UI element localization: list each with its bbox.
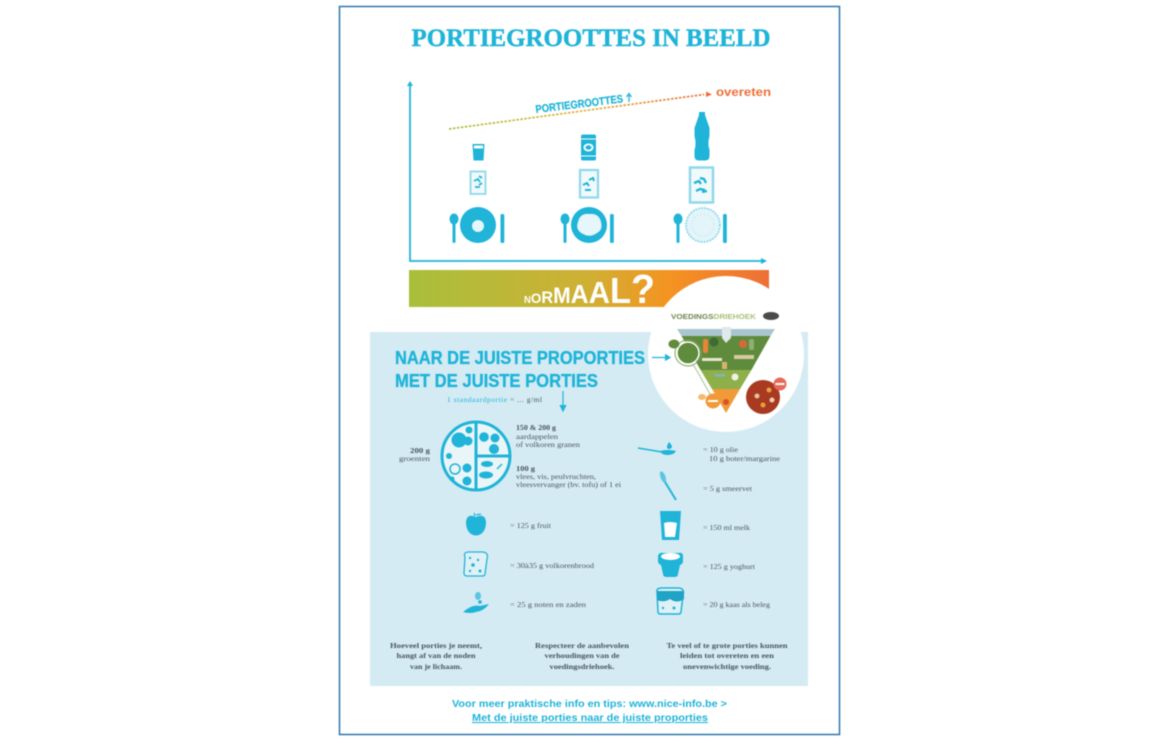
text: note 3: leiden tot overeten en een xyxy=(680,652,774,660)
icon: bread with cheese xyxy=(657,588,684,614)
callout: small green badge xyxy=(668,340,680,348)
food items xyxy=(703,339,708,353)
icon: knife xyxy=(659,471,676,500)
food pyramid xyxy=(677,327,775,413)
gradient bar xyxy=(409,270,769,307)
label: vegetables: groenten xyxy=(399,455,431,463)
connector line xyxy=(693,364,710,394)
text: oil xyxy=(703,446,780,463)
label: protein: 100 g xyxy=(516,465,536,473)
icon: medium chips bag xyxy=(580,170,598,198)
icon: plate medium serving xyxy=(560,207,614,243)
up arrow xyxy=(626,94,632,102)
text: note 3: onevenwichtige voeding. xyxy=(683,663,771,671)
banner text: NORMAAL? xyxy=(524,266,655,312)
triangle heading: VOEDINGS DRIEHOEK xyxy=(671,312,757,321)
text: bread: = 30à35 g volkorenbrood xyxy=(510,562,595,570)
icon: apple xyxy=(466,513,486,536)
text: note 1: hangt af van de noden xyxy=(396,652,476,660)
text: yoghurt: = 125 g yoghurt xyxy=(703,563,755,571)
plate diagram xyxy=(442,422,510,490)
text: note 3: Te veel of te grote porties kunnen xyxy=(666,642,788,650)
trend arrowhead xyxy=(706,92,712,97)
icon: yoghurt xyxy=(658,553,683,577)
callout: red circle xyxy=(746,380,780,414)
callout: minus badge xyxy=(774,378,786,390)
section heading: MET DE JUISTE PORTIES xyxy=(395,370,598,391)
footer links xyxy=(452,698,727,724)
text: milk: = 150 ml melk xyxy=(703,524,751,532)
label: potatoes xyxy=(516,424,581,449)
callout: orange circle xyxy=(706,394,720,408)
title: PORTIEGROOTTES IN BEELD xyxy=(412,25,770,52)
callout: small orange badge xyxy=(698,394,706,400)
text: oil: 10 g boter/margarine xyxy=(709,455,780,463)
text: fruit: = 125 g fruit xyxy=(510,522,551,530)
icon: plate large serving xyxy=(674,208,727,243)
text: note 2: voedingsdriehoek. xyxy=(550,663,615,671)
label: potatoes: of volkoren granen xyxy=(516,441,581,449)
arrow to triangle xyxy=(652,354,670,360)
label: protein xyxy=(516,465,621,489)
text: note 1: Hoeveel porties je neemt, xyxy=(390,642,482,650)
label: overeten: overeten xyxy=(716,87,771,99)
text: note 1: van je lichaam. xyxy=(410,663,462,671)
icon: bread xyxy=(464,552,488,576)
panel: proportions xyxy=(370,332,808,686)
text: note 2 xyxy=(535,642,629,671)
icon: large chips bag xyxy=(690,168,713,202)
dashed trend arrow xyxy=(449,94,704,129)
label: potatoes: aardappelen xyxy=(516,433,559,441)
icon: nuts on hand xyxy=(463,592,489,613)
label: portiegroottes: PORTIEGROOTTES xyxy=(535,93,624,116)
icon: small chips bag xyxy=(470,172,486,194)
text: note 2: verhoudingen van de xyxy=(544,652,620,660)
standard portion label: 1 standaardportie = ... g/ml xyxy=(447,395,542,404)
text: note 3 xyxy=(666,642,788,671)
label: potatoes: 150 & 200 g xyxy=(516,424,557,432)
logo mark xyxy=(763,312,779,320)
chart: portion sizes xyxy=(407,81,771,264)
icon: can xyxy=(581,134,596,160)
icon: tablespoon xyxy=(638,442,676,455)
text: nuts: = 25 g noten en zaden xyxy=(510,601,587,609)
water column xyxy=(722,327,731,343)
text: spread: = 5 g smeervet xyxy=(703,485,752,493)
section heading: NAAR DE JUISTE PROPORTIES xyxy=(395,347,645,368)
section heading xyxy=(395,347,645,391)
icon: milk glass xyxy=(660,511,681,540)
callout: green circle xyxy=(677,342,699,364)
chart axes xyxy=(410,84,765,261)
page frame xyxy=(340,6,840,734)
icon: glass xyxy=(472,144,484,160)
x axis arrowhead xyxy=(761,258,767,264)
y axis arrowhead xyxy=(407,81,413,86)
down arrow xyxy=(560,391,566,411)
icon: plate small serving xyxy=(450,207,504,243)
banner: normaal xyxy=(409,266,769,312)
label: protein: vleesvervanger (bv. tofu) of 1 ei xyxy=(516,481,621,489)
white circle with food triangle xyxy=(648,276,804,432)
label: protein: vlees, vis, peulvruchten, xyxy=(516,473,596,481)
text: note 1 xyxy=(390,642,482,671)
text: oil: = 10 g olie xyxy=(703,446,738,454)
label: vegetables: 200 g xyxy=(410,447,431,455)
text: note 2: Respecteer de aanbevolen xyxy=(535,642,629,650)
footer links: Met de juiste porties naar de juiste proporties xyxy=(472,712,708,724)
text: cheese: = 20 g kaas als beleg xyxy=(703,601,771,609)
label: vegetables xyxy=(399,447,431,463)
icon: bottle xyxy=(694,112,710,160)
footer links: Voor meer praktische info en tips: www.nice-info.be > xyxy=(452,698,727,710)
